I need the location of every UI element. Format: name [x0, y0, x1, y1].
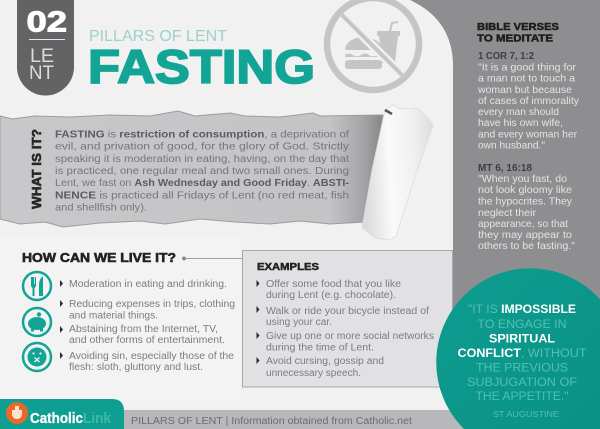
- subtitle: PILLARS OF LENT: [89, 28, 227, 45]
- list: how can we live it: and other forms of entertainment.: [69, 335, 225, 346]
- footer text: PILLARS OF LENT | Information obtained from Catholic.net: [131, 416, 412, 427]
- quote circle: [436, 268, 600, 429]
- definition text: and shellfish only).: [55, 202, 147, 214]
- verse: Mt 6: neglect their: [478, 208, 537, 219]
- examples list: during the time of Lent.: [266, 342, 374, 354]
- verse: Mt 6: "When you fast, do: [478, 174, 567, 185]
- heading: how can we live it: HOW CAN WE LIVE IT?: [22, 250, 176, 265]
- examples list: Walk or ride your bicycle instead of: [266, 306, 429, 317]
- right sidebar panel: [410, 0, 600, 429]
- icon: cutlery: [23, 272, 51, 300]
- examples list: using your car.: [266, 317, 332, 328]
- verse: Mt 6: [478, 163, 575, 252]
- bible verses heading: BIBLE VERSES: [477, 21, 559, 33]
- verse: Mt 6: MT 6, 16:18: [478, 163, 532, 174]
- verse: 1 Cor 7: and every woman her: [478, 130, 578, 140]
- list: how can we live it: Avoiding sin, especially those of the: [69, 351, 235, 362]
- examples list: during Lent (e.g. chocolate).: [266, 290, 396, 301]
- icon: face with crossed mouth: [23, 343, 51, 371]
- quote text: SUBJUGATION OF: [467, 375, 577, 389]
- verse: 1 Cor 7: 1 COR 7, 1:2: [478, 51, 534, 62]
- definition text: Lent, we fast on Ash Wednesday and Good Friday . ABSTI-: [55, 178, 349, 189]
- list: how can we live it: flesh: sloth, gluttony and lust.: [69, 362, 203, 373]
- verse: 1 Cor 7: [477, 51, 580, 152]
- icon: piggy bank: [23, 308, 51, 336]
- verse: Mt 6: they may appear to: [478, 230, 572, 241]
- icon: no food or drink: [327, 0, 419, 90]
- quote text: [458, 302, 587, 419]
- title: FASTING: [88, 40, 315, 93]
- definition text: is practiced, one regular meal and two small ones. During: [55, 166, 349, 177]
- verse: Mt 6: the hypocrites. They: [478, 196, 573, 208]
- panel: examples: [242, 250, 452, 387]
- list: how can we live it: Abstaining from the Internet, TV,: [69, 324, 218, 335]
- list: how can we live it: Moderation in eating and drinking.: [69, 279, 227, 290]
- examples list: Give up one or more social networks: [266, 331, 434, 342]
- connector line: [182, 256, 243, 260]
- footer bar: [120, 410, 600, 429]
- verse: Mt 6: not look gloomy like: [478, 185, 572, 196]
- logo tab: CatholicLink: [0, 399, 124, 429]
- quote text: THE PREVIOUS: [476, 360, 568, 374]
- verse: 1 Cor 7: of cases of immorality: [478, 96, 580, 107]
- examples list: Avoid cursing, gossip and: [266, 356, 384, 367]
- definition text: evil, and privation of good, for the glory of God. Strictly: [55, 142, 350, 153]
- verse: 1 Cor 7: own husband.": [478, 140, 545, 152]
- verse: 1 Cor 7: have his own wife,: [478, 118, 563, 129]
- definition text: FASTING is restriction of consumption , a deprivation of: [55, 130, 349, 140]
- quote text: THE APPETITE.": [476, 389, 568, 403]
- verse: Mt 6: appearance, so that: [478, 219, 568, 230]
- quote text: CONFLICT, WITHOUT: [458, 346, 587, 360]
- verse: 1 Cor 7: woman but because: [477, 85, 572, 96]
- logo tab: CatholicLink: Link: [83, 411, 112, 427]
- examples list: Offer some food that you like: [266, 279, 402, 290]
- verse: 1 Cor 7: every man should: [478, 107, 559, 118]
- badge: 02 Lent: 02: [26, 6, 67, 38]
- bible verses heading: TO MEDITATE: [477, 32, 553, 44]
- quote text: "IT IS IMPOSSIBLE: [468, 302, 576, 316]
- badge: 02 Lent: NT: [29, 63, 54, 84]
- quote text: ST AUGUSTINE: [493, 410, 559, 419]
- quote text: TO ENGAGE IN: [478, 317, 566, 331]
- verse: 1 Cor 7: a man not to touch a: [478, 74, 575, 84]
- badge: 02 Lent: LE: [30, 46, 54, 67]
- examples list: unnecessary speech.: [266, 368, 361, 379]
- logo tab: CatholicLink: Catholic: [30, 411, 83, 427]
- badge: 02 Lent: [17, 0, 74, 96]
- definition text: [55, 130, 350, 214]
- examples list: [256, 279, 434, 379]
- list: how can we live it: and material things.: [69, 310, 158, 322]
- panel: what is it: [0, 111, 383, 227]
- bible verses heading: [477, 21, 559, 44]
- quote text: SPIRITUAL: [489, 332, 555, 346]
- peeled paper roll: [362, 105, 433, 240]
- verse: 1 Cor 7: "It is a good thing for: [478, 62, 577, 74]
- list: how can we live it: Reducing expenses in trips, clothing: [69, 299, 235, 310]
- list: how can we live it: [60, 279, 235, 373]
- verse: Mt 6: others to be fasting.": [478, 241, 575, 252]
- definition text: speaking it is moderation in eating, having, on the day that: [55, 154, 349, 165]
- definition text: NENCE is practiced all Fridays of Lent (no red meat, fish: [55, 190, 349, 201]
- heading: what is it: WHAT IS IT?: [29, 129, 44, 209]
- heading: examples: EXAMPLES: [257, 261, 319, 273]
